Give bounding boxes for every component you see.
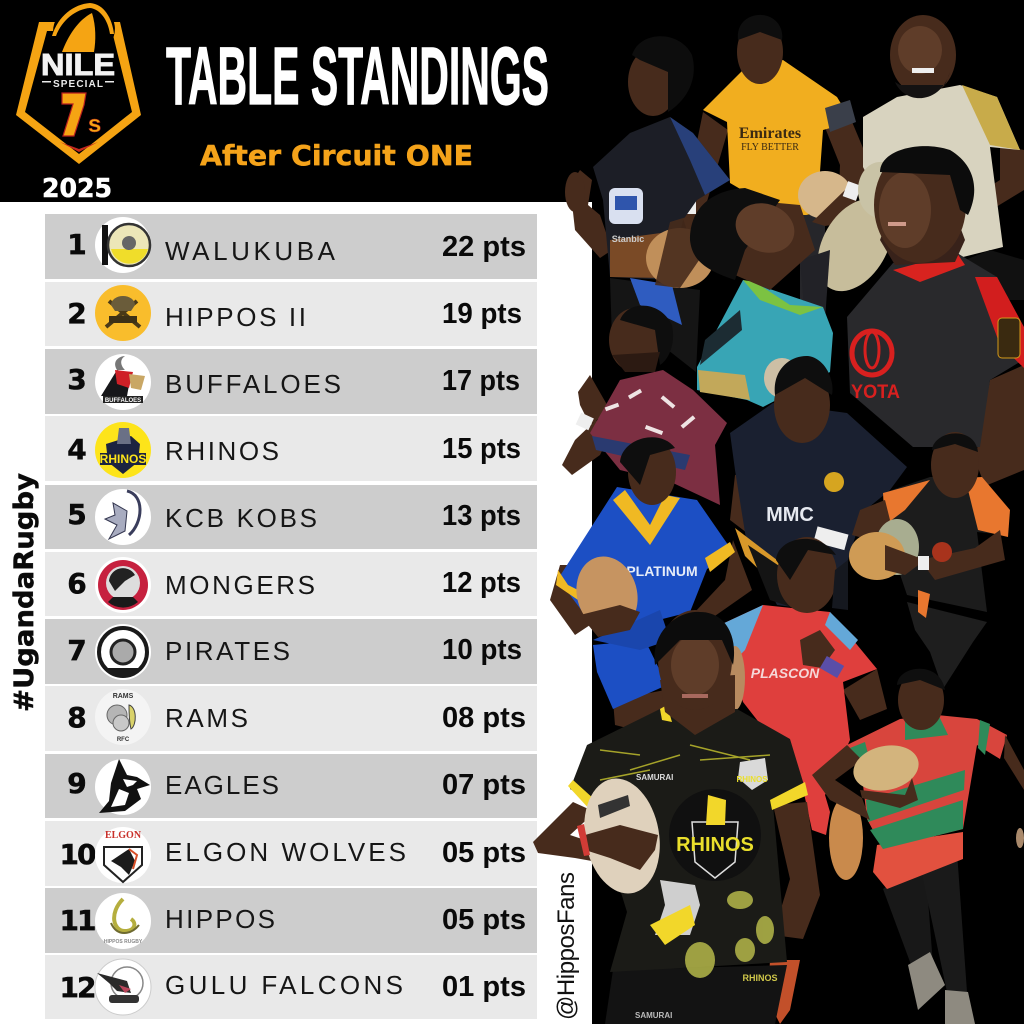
player: orange and black jersey: [849, 432, 1010, 689]
row 4: Rhinos: 15 pts: [442, 433, 521, 465]
logo: Buffaloes: [95, 354, 151, 410]
row 7: Pirates: PIRATES: [165, 636, 290, 666]
row 3: Buffaloes: [45, 349, 537, 414]
row 2: Hippos II: [45, 282, 537, 346]
row 12: Gulu Falcons: 12: [60, 971, 95, 1004]
row 3: Buffaloes: BUFFALOES: [165, 369, 341, 399]
row 11: Hippos: [45, 888, 537, 953]
row 1: Walukuba: WALUKUBA: [165, 236, 336, 266]
player: red Plascon jersey: [720, 537, 887, 880]
row 9: Eagles: [45, 754, 537, 818]
row 5: KCB Kobs: 13 pts: [442, 500, 521, 532]
player: teal jersey, head raised: [690, 188, 833, 407]
row 10: Elgon Wolves: ELGON WOLVES: [165, 837, 406, 867]
row 4: Rhinos: RHINOS: [165, 436, 279, 466]
row 11: Hippos: HIPPOS: [165, 904, 275, 934]
row 2: Hippos II: HIPPOS II: [165, 302, 306, 332]
row 7: Pirates: [45, 619, 537, 684]
row 5: KCB Kobs: 5: [67, 498, 87, 531]
player: green and red hooped jersey: [812, 669, 1024, 1024]
player: yellow Emirates jersey: FLY BETTER: [741, 142, 799, 153]
event logo: Nile Special 7s: SPECIAL: [53, 79, 103, 90]
standings table: [45, 214, 537, 1019]
player: navy MMC jersey: [730, 356, 907, 610]
logo: Elgon Wolves: ELGON: [105, 830, 142, 841]
row 6: Mongers: MONGERS: [165, 570, 315, 600]
row 1: Walukuba: [45, 214, 537, 279]
player: navy MMC jersey: MMC: [766, 504, 814, 526]
player: blue Platinum jersey: PLATINUM: [626, 563, 698, 579]
player: Rhinos black and yellow jersey, front: SAMURAI: [636, 773, 673, 782]
row 4: Rhinos: 4: [67, 433, 87, 466]
player: Rhinos black and yellow jersey, front: [533, 610, 820, 1024]
player: Rhinos black and yellow jersey, front: SAMURAI: [635, 1011, 672, 1020]
subtitle: After Circuit ONE: [200, 139, 473, 172]
player: black and red Toyota jersey: [847, 146, 1024, 486]
logo: Rhinos: [95, 422, 151, 478]
row 8: Rams: RAMS: [165, 703, 248, 733]
row 2: Hippos II: 2: [67, 297, 87, 330]
logo: Rhinos: RHINOS: [100, 452, 146, 466]
row 9: Eagles: 9: [67, 767, 87, 800]
row 10: Elgon Wolves: [45, 821, 537, 886]
logo: Elgon Wolves: [95, 827, 151, 883]
hashtag: #UgandaRugby: [9, 473, 40, 712]
logo: KCB Kobs: [95, 489, 151, 545]
row 12: Gulu Falcons: [45, 955, 537, 1019]
row 12: Gulu Falcons: 01 pts: [442, 971, 526, 1003]
event logo: Nile Special 7s: s: [88, 111, 101, 138]
row 9: Eagles: EAGLES: [165, 770, 279, 800]
logo: Pirates: [95, 624, 151, 680]
player: blue Platinum jersey: [550, 437, 752, 730]
row 8: Rams: 08 pts: [442, 702, 526, 734]
player collage: [533, 15, 1024, 1024]
row 1: Walukuba: 1: [67, 228, 87, 261]
logo: Hippos: HIPPOS RUGBY: [104, 939, 143, 945]
logo: Buffaloes: BUFFALOES: [105, 398, 141, 404]
player: black Stanbic jersey: Stanbic: [612, 234, 644, 244]
year: 2025: [42, 174, 112, 204]
row 11: Hippos: 05 pts: [442, 904, 526, 936]
player: yellow Emirates jersey: Emirates: [739, 125, 801, 142]
row 3: Buffaloes: 3: [67, 363, 87, 396]
player: black and red Toyota jersey: YOTA: [851, 382, 900, 403]
player: red Plascon jersey: PLASCON: [751, 665, 820, 681]
logo: Rams: [95, 689, 151, 745]
row 10: Elgon Wolves: 05 pts: [442, 837, 526, 869]
logo: Eagles: [95, 759, 151, 815]
row 12: Gulu Falcons: GULU FALCONS: [165, 970, 403, 1000]
logo: Hippos II: [95, 285, 151, 341]
handle: @HipposFans: [553, 872, 580, 1020]
white table panel: [0, 202, 592, 1024]
row 8: Rams: 8: [67, 701, 87, 734]
row 8: Rams: [45, 686, 537, 751]
player: black Stanbic jersey: [565, 36, 730, 372]
row 3: Buffaloes: 17 pts: [442, 365, 520, 397]
logo: Mongers: [95, 557, 151, 613]
player: Rhinos black and yellow jersey, front: RHINOS: [742, 973, 778, 983]
player: Rhinos black and yellow jersey, front: RHINOS: [736, 775, 768, 784]
logo: Gulu Falcons: [95, 959, 151, 1015]
logo: Rams: RAMS: [113, 693, 134, 700]
row 10: Elgon Wolves: 10: [60, 838, 96, 871]
row 5: KCB Kobs: KCB KOBS: [165, 503, 317, 533]
player: yellow Emirates jersey: [682, 15, 868, 300]
row 7: Pirates: 7: [67, 634, 87, 667]
row 4: Rhinos: [45, 416, 537, 481]
player: cream jersey, smiling: [802, 15, 1024, 304]
row 6: Mongers: 12 pts: [442, 567, 521, 599]
row 9: Eagles: 07 pts: [442, 769, 526, 801]
row 5: KCB Kobs: [45, 485, 537, 549]
event logo: Nile Special 7s: NILE: [41, 47, 115, 82]
row 7: Pirates: 10 pts: [442, 634, 522, 666]
player: maroon jersey: [562, 306, 727, 505]
row 1: Walukuba: 22 pts: [442, 231, 526, 263]
row 6: Mongers: 6: [67, 567, 87, 600]
logo: Hippos: [95, 893, 151, 949]
row 6: Mongers: [45, 552, 537, 616]
logo: Walukuba: [95, 217, 151, 273]
event logo: Nile Special 7s: [16, 0, 141, 164]
text: TABLE STANDINGS: [166, 31, 549, 122]
player: Rhinos black and yellow jersey, front: RHINOS: [676, 834, 754, 856]
row 11: Hippos: 11: [60, 904, 95, 937]
row 2: Hippos II: 19 pts: [442, 298, 522, 330]
logo: Rams: RFC: [117, 737, 130, 743]
